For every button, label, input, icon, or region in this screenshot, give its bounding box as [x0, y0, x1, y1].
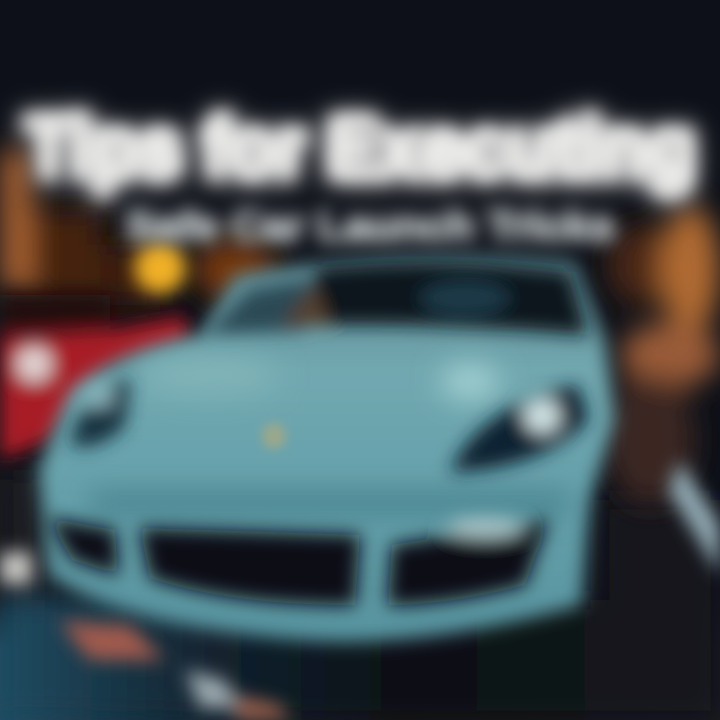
front grille intakes	[48, 518, 548, 605]
car body	[38, 256, 615, 642]
windshield	[205, 262, 588, 335]
red car	[0, 295, 190, 460]
subtitle: Safe Car Launch Tricks	[125, 202, 615, 249]
road markings	[0, 460, 720, 720]
hood highlight	[90, 355, 570, 514]
warm background lights right	[605, 205, 720, 505]
icy blue car	[38, 256, 615, 642]
right headlight	[450, 385, 588, 472]
hood badge	[262, 423, 286, 449]
warm background lights left	[0, 150, 277, 305]
left headlight	[70, 378, 130, 446]
yellow light	[134, 242, 186, 294]
road base	[0, 604, 228, 720]
road	[0, 470, 720, 720]
